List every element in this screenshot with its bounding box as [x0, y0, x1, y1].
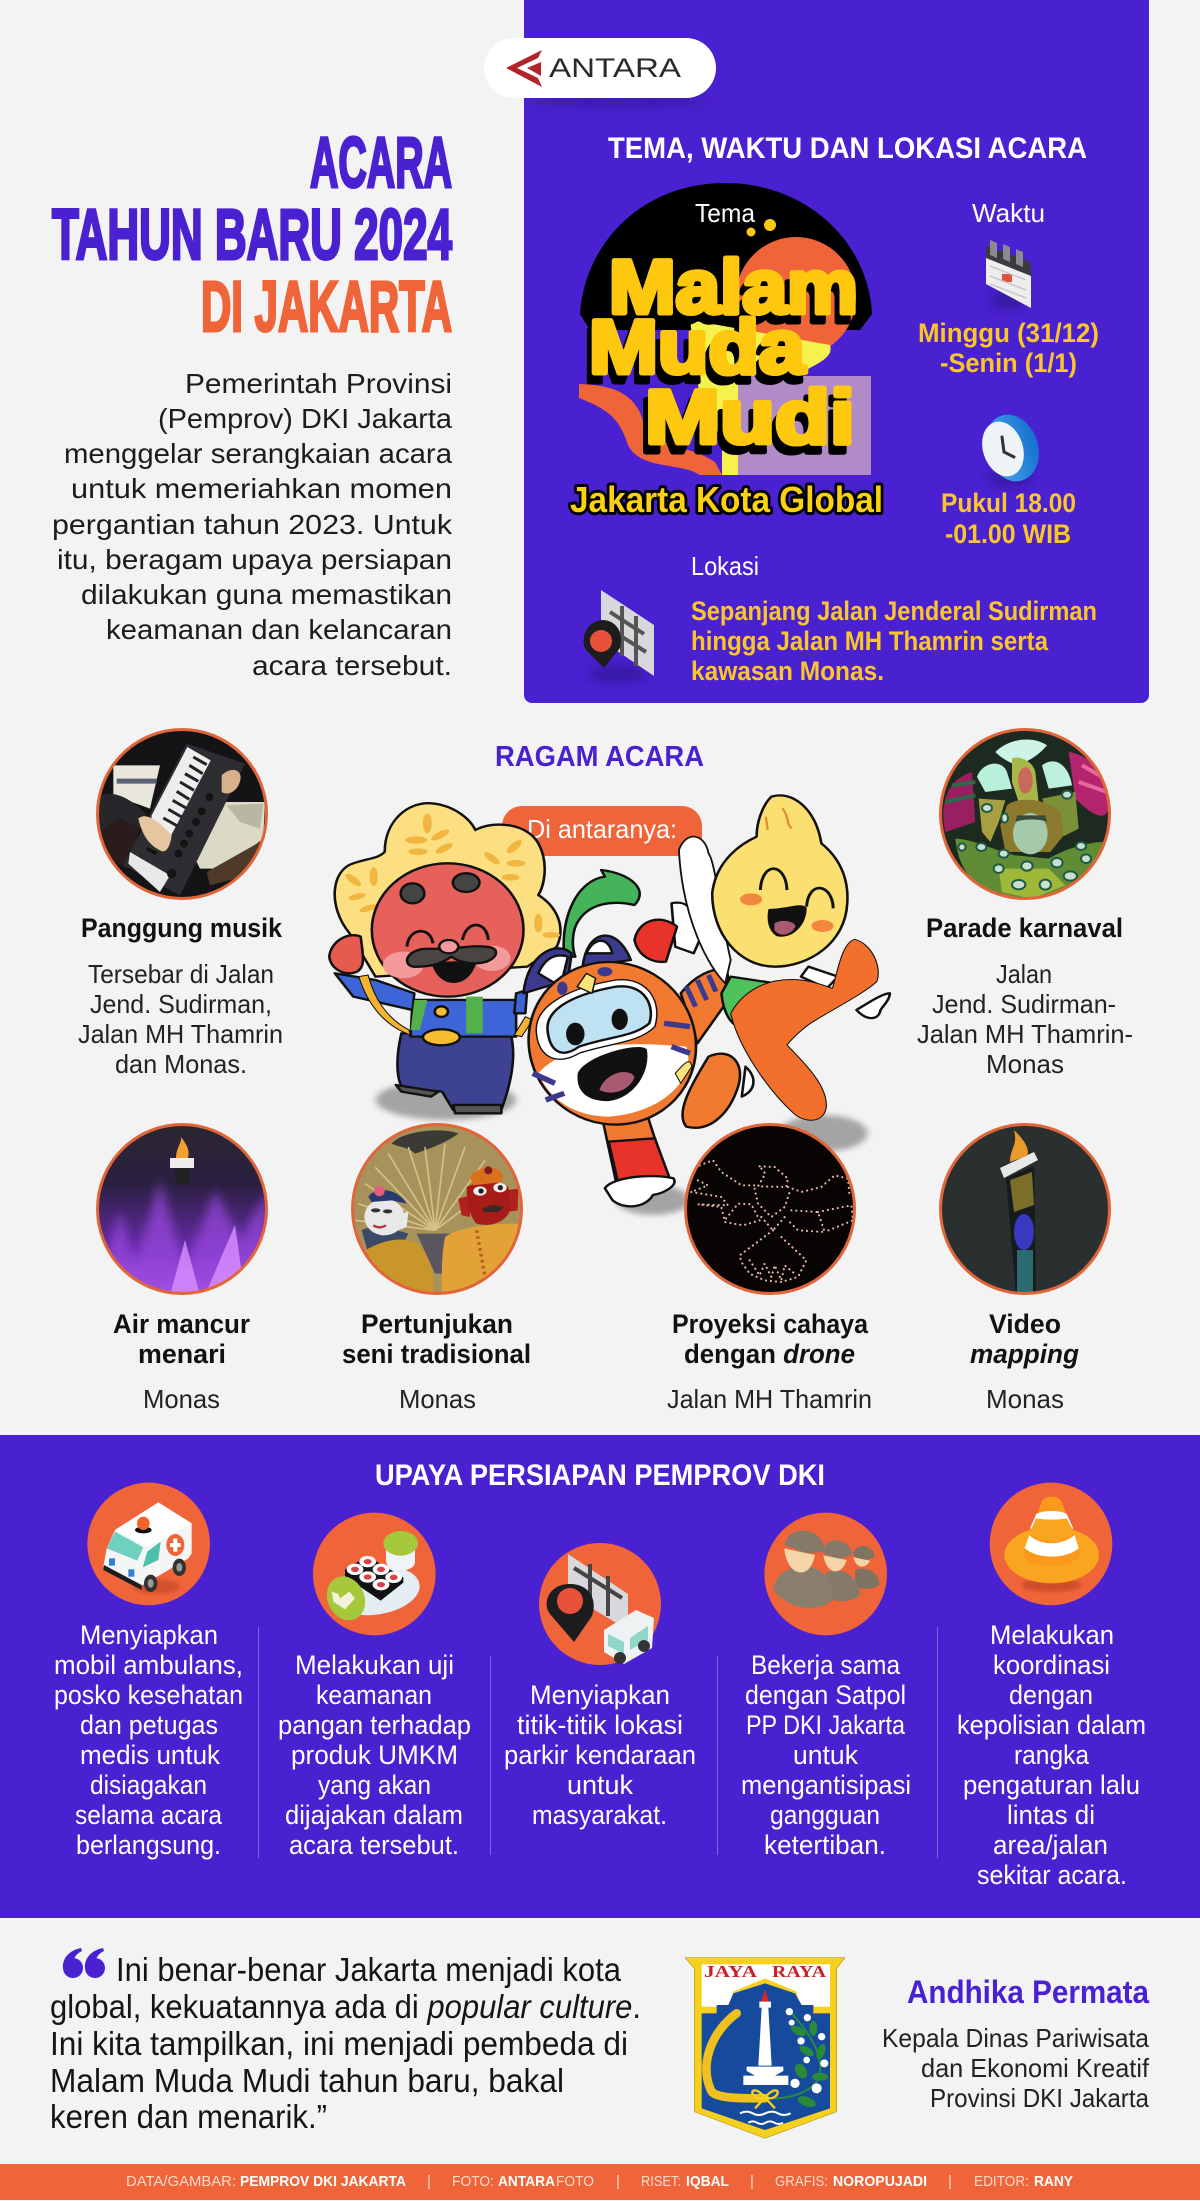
description: Bekerja sama: [751, 1650, 901, 1680]
event: panggung musik: [78, 722, 283, 1079]
quote text: Ini benar-benar Jakarta menjadi kota: [116, 1951, 622, 1988]
step: ambulans: [54, 1483, 243, 1860]
description: area/jalan: [993, 1830, 1108, 1860]
description: keamanan: [316, 1680, 432, 1710]
heading: ragam acara: RAGAM ACARA: [495, 741, 704, 773]
title: TAHUN BARU 2024: [52, 196, 452, 275]
quote text: global, kekuatannya ada di popular culture.: [50, 1988, 641, 2025]
intro text block: menggelar serangkaian acara: [64, 438, 452, 469]
icon: three people: [764, 1513, 887, 1635]
footer credits: GRAFIS:: [775, 2173, 828, 2190]
crest motto: [704, 1962, 827, 1981]
footer credits: |: [948, 2173, 952, 2190]
speaker name and title: Provinsi DKI Jakarta: [930, 2083, 1149, 2113]
description: [957, 1620, 1146, 1890]
event: video mapping: [940, 1123, 1112, 1414]
label: Air mancur: [113, 1309, 250, 1339]
label: menari: [138, 1339, 226, 1369]
event: parade karnaval: [917, 722, 1133, 1079]
location: Jalan: [996, 959, 1052, 989]
crest motto: JAYA: [704, 1962, 758, 1981]
location: Monas: [986, 1049, 1064, 1079]
speaker name and title: Kepala Dinas Pariwisata: [882, 2023, 1150, 2053]
speaker name and title: Andhika Permata: [907, 1974, 1149, 2010]
footer credits: |: [750, 2173, 754, 2190]
panel heading: TEMA, WAKTU DAN LOKASI ACARA: [608, 132, 1087, 165]
event: proyeksi cahaya dengan drone: [667, 1123, 872, 1414]
intro text block: [52, 368, 453, 681]
description: Menyiapkan: [530, 1680, 670, 1710]
label: mapping: [970, 1339, 1079, 1369]
description: acara tersebut.: [289, 1830, 459, 1860]
location: Jalan MH Thamrin: [78, 1019, 283, 1049]
location: [917, 959, 1133, 1079]
event: air mancur menari: [96, 1123, 268, 1414]
description: ketertiban.: [764, 1830, 886, 1860]
logo: antara pill: [484, 38, 716, 107]
theme label: Tema: [695, 198, 756, 228]
description: titik-titik lokasi: [517, 1710, 683, 1740]
description: dijajakan dalam: [285, 1800, 463, 1830]
logo: antara pill: ANTARA: [549, 53, 681, 83]
photo: ondel-ondel: [354, 1126, 520, 1292]
footer credits: RISET:: [641, 2173, 681, 2190]
icon: ambulance: [87, 1483, 210, 1605]
location: Jend. Sudirman,: [90, 989, 272, 1019]
logo: malam muda mudi: [570, 183, 883, 520]
description: pengaturan lalu: [963, 1770, 1140, 1800]
description: PP DKI Jakarta: [746, 1710, 906, 1740]
quote text: keren dan menarik.”: [50, 2098, 327, 2135]
mascot: rice hat character: [329, 803, 560, 1113]
location: Monas: [399, 1384, 476, 1414]
text: lokasi: [691, 596, 1097, 686]
step: koordinasi kepolisian: [957, 1483, 1146, 1890]
footer credits: NOROPUJADI: [833, 2173, 927, 2190]
panel heading: UPAYA PERSIAPAN PEMPROV DKI: [375, 1459, 825, 1492]
mascot: flame character: [679, 795, 890, 1120]
crest motto: RAYA: [772, 1962, 827, 1981]
description: untuk: [567, 1770, 633, 1800]
label: dengan drone: [684, 1339, 855, 1369]
location: Jalan MH Thamrin-: [917, 1019, 1133, 1049]
photo: carnival costume: [942, 731, 1108, 897]
quote: [50, 1948, 641, 2135]
label: [342, 1309, 531, 1369]
description: [504, 1680, 696, 1830]
intro text block: itu, beragam upaya persiapan: [57, 544, 452, 575]
location: Jalan MH Thamrin: [667, 1384, 872, 1414]
icon: map pin: [584, 590, 654, 682]
footer credits: RANY: [1034, 2173, 1073, 2190]
label pill: di antaranya: [502, 806, 702, 856]
step: satpol pp: [741, 1513, 911, 1860]
logo wordmark: [589, 245, 858, 460]
description: Melakukan uji: [295, 1650, 454, 1680]
label: waktu: Waktu: [972, 198, 1045, 228]
logo tagline: Jakarta Kota Global: [570, 479, 883, 520]
footer credits: [0, 2164, 1200, 2200]
intro text block: pergantian tahun 2023. Untuk: [52, 509, 453, 540]
footer credits: IQBAL: [686, 2173, 729, 2190]
footer credits: PEMPROV DKI JAKARTA: [240, 2173, 406, 2190]
description: lintas di: [1007, 1800, 1095, 1830]
intro text block: untuk memeriahkan momen: [71, 473, 452, 504]
description: [741, 1650, 911, 1860]
description: posko kesehatan: [54, 1680, 243, 1710]
description: sekitar acara.: [977, 1860, 1127, 1890]
footer credits: |: [427, 2173, 431, 2190]
speaker name and title: [882, 1974, 1150, 2113]
location: Monas: [986, 1384, 1064, 1414]
step: keamanan pangan: [278, 1513, 471, 1860]
text: tanggal: -Senin (1/1): [940, 348, 1077, 378]
footer credits: DATA/GAMBAR:: [126, 2173, 236, 2190]
description: Menyiapkan: [80, 1620, 218, 1650]
description: parkir kendaraan: [504, 1740, 696, 1770]
title: [52, 124, 452, 347]
icon: sushi plate: [313, 1513, 436, 1635]
illustration: three mascots: [329, 795, 890, 1215]
label pill: di antaranya: Di antaranya:: [527, 814, 677, 844]
description: yang akan: [318, 1770, 431, 1800]
description: medis untuk: [80, 1740, 220, 1770]
intro text block: acara tersebut.: [252, 650, 452, 681]
label: lokasi: Lokasi: [691, 551, 759, 581]
label: [970, 1309, 1079, 1369]
description: untuk: [793, 1740, 858, 1770]
description: disiagakan: [90, 1770, 207, 1800]
description: dengan Satpol: [745, 1680, 906, 1710]
title: DI JAKARTA: [201, 268, 452, 347]
footer credits: EDITOR:: [974, 2173, 1029, 2190]
label: seni tradisional: [342, 1339, 531, 1369]
label: Panggung musik: [81, 913, 283, 943]
description: koordinasi: [993, 1650, 1110, 1680]
icon: traffic cone: [990, 1483, 1112, 1605]
speaker name and title: dan Ekonomi Kreatif: [921, 2053, 1150, 2083]
quote text: [50, 1951, 641, 2135]
text: lokasi: Sepanjang Jalan Jenderal Sudirman: [691, 596, 1097, 626]
label: Pertunjukan: [361, 1309, 513, 1339]
logo wordmark: Mudi: [645, 375, 855, 460]
label: Proyeksi cahaya: [672, 1309, 869, 1339]
text: tanggal: Minggu (31/12): [918, 318, 1099, 348]
ground shadows: [376, 1080, 868, 1215]
description: dengan: [1009, 1680, 1093, 1710]
quote text: Malam Muda Mudi tahun baru, bakal: [50, 2062, 564, 2099]
location: Monas: [143, 1384, 220, 1414]
logo wordmark: Malam: [609, 245, 858, 330]
description: kepolisian dalam: [957, 1710, 1146, 1740]
description: [54, 1620, 243, 1860]
label: Video: [989, 1309, 1061, 1339]
footer credits: ANTARA: [498, 2173, 555, 2190]
column dividers: [258, 1627, 938, 1858]
mascot: tiger character: [510, 870, 753, 1206]
title: ACARA: [310, 124, 452, 203]
step: parkir: [504, 1543, 696, 1830]
location: dan Monas.: [115, 1049, 247, 1079]
intro text block: Pemerintah Provinsi: [185, 368, 452, 399]
description: berlangsung.: [76, 1830, 221, 1860]
panel: upaya persiapan: [0, 1435, 1200, 1918]
description: pangan terhadap: [278, 1710, 471, 1740]
description: masyarakat.: [532, 1800, 667, 1830]
photo: keyboard: [99, 731, 265, 897]
location: [78, 959, 283, 1079]
footer credits: |: [616, 2173, 620, 2190]
icon: pin and van: [539, 1543, 661, 1665]
description: dan petugas: [80, 1710, 218, 1740]
intro text block: dilakukan guna memastikan: [81, 579, 452, 610]
description: gangguan: [770, 1800, 880, 1830]
photo: dancing fountain: [96, 1123, 268, 1295]
icon: quote mark: [63, 1948, 105, 1978]
description: mobil ambulans,: [54, 1650, 243, 1680]
panel: tema, waktu dan lokasi: [484, 0, 1149, 703]
label: [113, 1309, 250, 1369]
description: Melakukan: [990, 1620, 1114, 1650]
footer credits: FOTO: [556, 2173, 594, 2190]
description: selama acara: [75, 1800, 223, 1830]
label: [672, 1309, 869, 1369]
photo: monas mapping: [940, 1123, 1112, 1295]
text: tanggal: [918, 318, 1099, 378]
description: [278, 1650, 471, 1860]
text: lokasi: kawasan Monas.: [691, 656, 884, 686]
text: lokasi: hingga Jalan MH Thamrin serta: [691, 626, 1049, 656]
description: rangka: [1014, 1740, 1090, 1770]
location: Jend. Sudirman-: [932, 989, 1116, 1019]
icon: calendar: [986, 240, 1031, 309]
crest: dki jakarta: [685, 1958, 845, 2138]
quote text: Ini kita tampilkan, ini menjadi pembeda di: [50, 2025, 628, 2062]
logo wordmark: Muda: [589, 305, 806, 390]
label: Parade karnaval: [926, 913, 1123, 943]
text: pukul: -01.00 WIB: [945, 519, 1071, 549]
description: produk UMKM: [291, 1740, 458, 1770]
location: Tersebar di Jalan: [88, 959, 274, 989]
icon: clock: [975, 408, 1047, 488]
text: pukul: Pukul 18.00: [941, 488, 1076, 518]
footer credits: FOTO:: [452, 2173, 494, 2190]
intro text block: keamanan dan kelancaran: [106, 614, 452, 645]
photo: drone show: [685, 1123, 857, 1295]
intro text block: (Pemprov) DKI Jakarta: [158, 403, 452, 434]
text: pukul: [941, 488, 1076, 549]
description: mengantisipasi: [741, 1770, 911, 1800]
event: pertunjukan seni tradisional: [342, 1117, 531, 1414]
